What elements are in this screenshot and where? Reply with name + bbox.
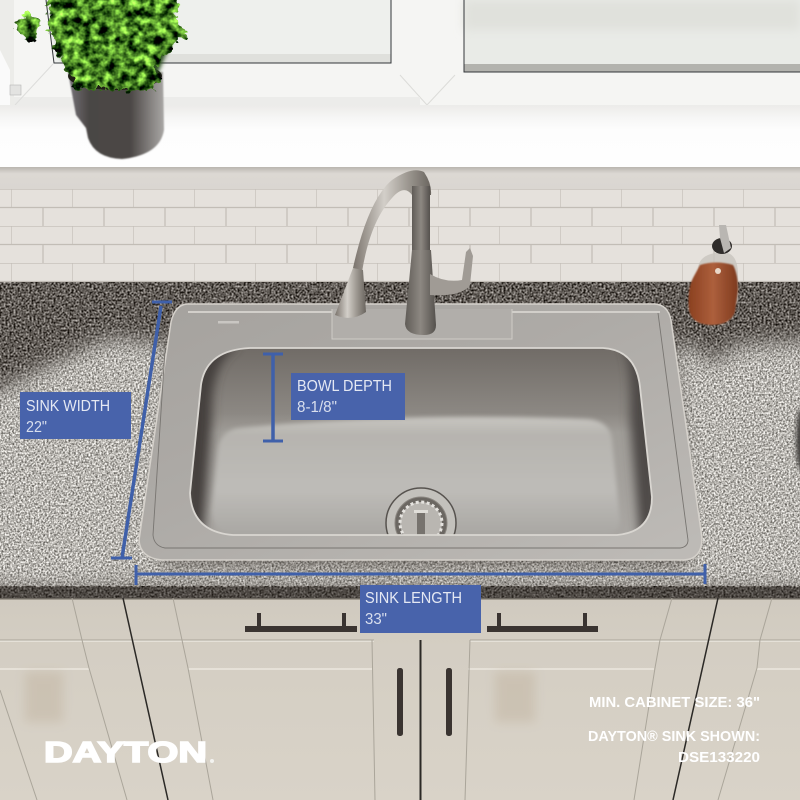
foliage (17, 0, 184, 90)
callout: sink width: SINK WIDTH (26, 398, 110, 415)
foliage dark base (52, 0, 172, 80)
sink bowl (190, 348, 652, 534)
sink width dimension line (111, 302, 172, 558)
callout: sink length (360, 585, 481, 633)
Dayton logo: DAYTON (44, 737, 207, 769)
callout: bowl depth: 8-1/8" (297, 399, 337, 416)
faucet (335, 170, 473, 335)
right window pane (464, 0, 800, 72)
drawer handle right (487, 613, 598, 632)
sill front lip (0, 167, 800, 189)
faucet deck plate (332, 309, 512, 339)
door handle right (446, 668, 452, 736)
window sill (0, 105, 800, 168)
granite countertop (0, 282, 800, 599)
callout: sink length: 33" (365, 611, 387, 628)
plant pot (68, 62, 164, 159)
sink deck (139, 304, 702, 560)
sink (139, 304, 702, 560)
brand mark (218, 321, 239, 324)
cabinet gaps (123, 598, 718, 800)
left window pane (46, 0, 391, 63)
door handle left (397, 668, 403, 736)
spec text (588, 694, 760, 766)
faucet neck (412, 186, 430, 271)
callout: bowl depth: BOWL DEPTH (297, 378, 392, 395)
callout: bowl depth (291, 373, 405, 420)
callout: sink width: 22" (26, 419, 47, 436)
window frame and glass (0, 0, 800, 145)
sink length dimension line (136, 564, 705, 585)
drain strainer (385, 487, 457, 534)
faucet lever handle (430, 248, 473, 295)
drawer handle left (245, 613, 357, 632)
spec text: DSE133220 (678, 749, 760, 766)
cabinets (0, 598, 800, 800)
callout: sink length: SINK LENGTH (365, 590, 462, 607)
callout: sink width (20, 392, 131, 439)
spec text: DAYTON® SINK SHOWN: (588, 728, 760, 745)
faucet body (405, 250, 436, 335)
subway tile backsplash (0, 189, 800, 283)
soap dispenser (688, 225, 738, 325)
bowl depth dimension line (263, 353, 283, 441)
spout (353, 170, 431, 272)
spec text: MIN. CABINET SIZE: 36" (589, 694, 760, 711)
plant in pot (17, 0, 184, 159)
pull-down spray head (335, 268, 366, 318)
